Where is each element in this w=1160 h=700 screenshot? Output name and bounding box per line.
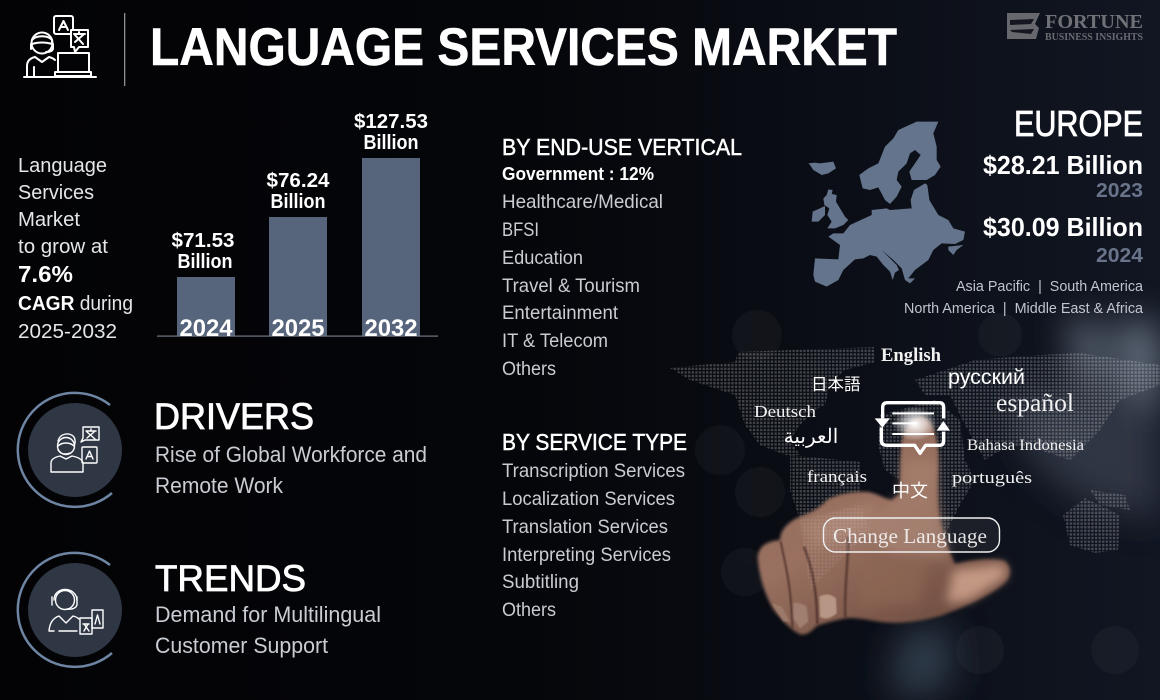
translate icon [875, 403, 950, 453]
header icon: agent with laptop and translation bubbles [24, 16, 96, 77]
logo: Fortune Business Insights [1007, 11, 1143, 43]
CAGR text block: Language [18, 155, 107, 177]
CAGR text block [18, 155, 133, 343]
segment list: by service type: Subtitling [502, 571, 579, 593]
trends text [155, 602, 381, 658]
language labels: 中文 [892, 481, 928, 501]
map: Europe [808, 122, 965, 287]
icon: trends ring and headset agent [18, 553, 122, 667]
drivers heading: DRIVERS [154, 396, 314, 437]
language labels: Bahasa Indonesia [967, 437, 1084, 454]
language labels: español [996, 390, 1074, 417]
bar chart: $71.53 [172, 230, 234, 252]
drivers text: Remote Work [155, 473, 284, 498]
fingertip glow [893, 407, 937, 441]
segment list: by end-use vertical: IT & Telecom [502, 330, 608, 352]
segment list: by end-use vertical: Healthcare/Medical [502, 191, 663, 213]
change language button [824, 518, 1000, 552]
drivers text: Rise of Global Workforce and [155, 442, 427, 467]
segment list: by service type: Translation Services [502, 516, 668, 538]
Crimea [948, 245, 963, 255]
logo: Fortune Business Insights: BUSINESS INSIGHTS [1045, 32, 1143, 43]
segment list: by service type: Localization Services [502, 488, 675, 510]
bar chart: 2032 [364, 315, 418, 342]
Britain [823, 189, 848, 228]
CAGR text block: Services [18, 182, 94, 204]
panel: Europe figures: $30.09 Billion [983, 212, 1143, 242]
language labels [754, 345, 1084, 501]
segment list: by service type: BY SERVICE TYPE [502, 429, 687, 455]
bar chart: $76.24 [266, 170, 330, 192]
bar chart: $127.53 [354, 111, 428, 133]
CAGR text block: 2025-2032 [18, 321, 117, 343]
CAGR text block: Market [18, 209, 80, 231]
hand base silhouette [758, 417, 1010, 635]
segment list: by end-use vertical: Entertainment [502, 302, 619, 324]
language labels: português [952, 468, 1032, 487]
bar chart: Billion [364, 132, 418, 154]
segment list: by service type: Transcription Services [502, 460, 685, 482]
segment list: by end-use vertical: Travel & Tourism [502, 275, 640, 297]
curled fingers [772, 537, 848, 628]
language labels: English [881, 345, 941, 366]
panel: Europe figures: 2023 [1096, 180, 1143, 202]
language labels: français [807, 467, 867, 486]
icon: drivers ring and agent [18, 393, 122, 507]
segment list: by end-use vertical [502, 134, 742, 380]
bar chart: 2024 [180, 315, 233, 342]
change language button: Change Language [833, 524, 987, 548]
bar chart: Billion [178, 251, 232, 273]
panel: Europe figures: Asia Pacific | South America [956, 278, 1144, 295]
CAGR text block: to grow at [18, 236, 108, 258]
trends text: Demand for Multilingual [155, 602, 381, 627]
segment list: by end-use vertical: BY END-USE VERTICAL [502, 134, 742, 160]
bar chart [157, 111, 438, 342]
CAGR text block: 7.6% [18, 261, 73, 287]
trends heading: TRENDS [155, 558, 306, 599]
segment list: by service type [502, 429, 687, 621]
photo: hand pressing language screen [670, 310, 1160, 700]
language labels: 日本語 [811, 375, 860, 394]
hand light areas [800, 460, 1007, 607]
bar chart: 2025 [272, 315, 324, 342]
dotted world map [670, 347, 1160, 553]
dots over hand [800, 505, 870, 590]
language labels: العربية [784, 426, 838, 448]
blurred sleeve [890, 322, 1160, 700]
panel: Europe figures [904, 103, 1144, 317]
CAGR text block: CAGR during [18, 293, 133, 315]
Mainland Europe [813, 183, 965, 287]
bar chart: Billion [270, 191, 326, 213]
hand [758, 417, 1010, 635]
segment list: by end-use vertical: Others [502, 358, 556, 380]
segment list: by end-use vertical: Education [502, 247, 583, 269]
Ireland [812, 206, 825, 222]
Iceland [808, 162, 836, 175]
panel: Europe figures: North America | Middle East & Africa [904, 300, 1144, 317]
header divider [124, 13, 125, 86]
segment list: by end-use vertical: BFSI [502, 219, 539, 241]
panel: Europe figures: 2024 [1096, 245, 1144, 267]
segment list: by service type: Interpreting Services [502, 544, 671, 566]
segment list: by end-use vertical: Government : 12% [502, 164, 654, 184]
drivers text [155, 442, 427, 498]
panel: drivers [18, 393, 427, 507]
Scandinavia and Finland [859, 122, 941, 204]
segment list: by service type: Others [502, 599, 556, 621]
language labels: Deutsch [754, 402, 817, 421]
logo: Fortune Business Insights: FORTUNE [1045, 11, 1143, 33]
panel: Europe figures: $28.21 Billion [983, 150, 1143, 180]
title: LANGUAGE SERVICES MARKET [150, 18, 897, 77]
bokeh circles [695, 310, 1139, 674]
panel: trends [18, 553, 381, 667]
language labels: русский [948, 366, 1025, 389]
trends text: Customer Support [155, 633, 328, 658]
